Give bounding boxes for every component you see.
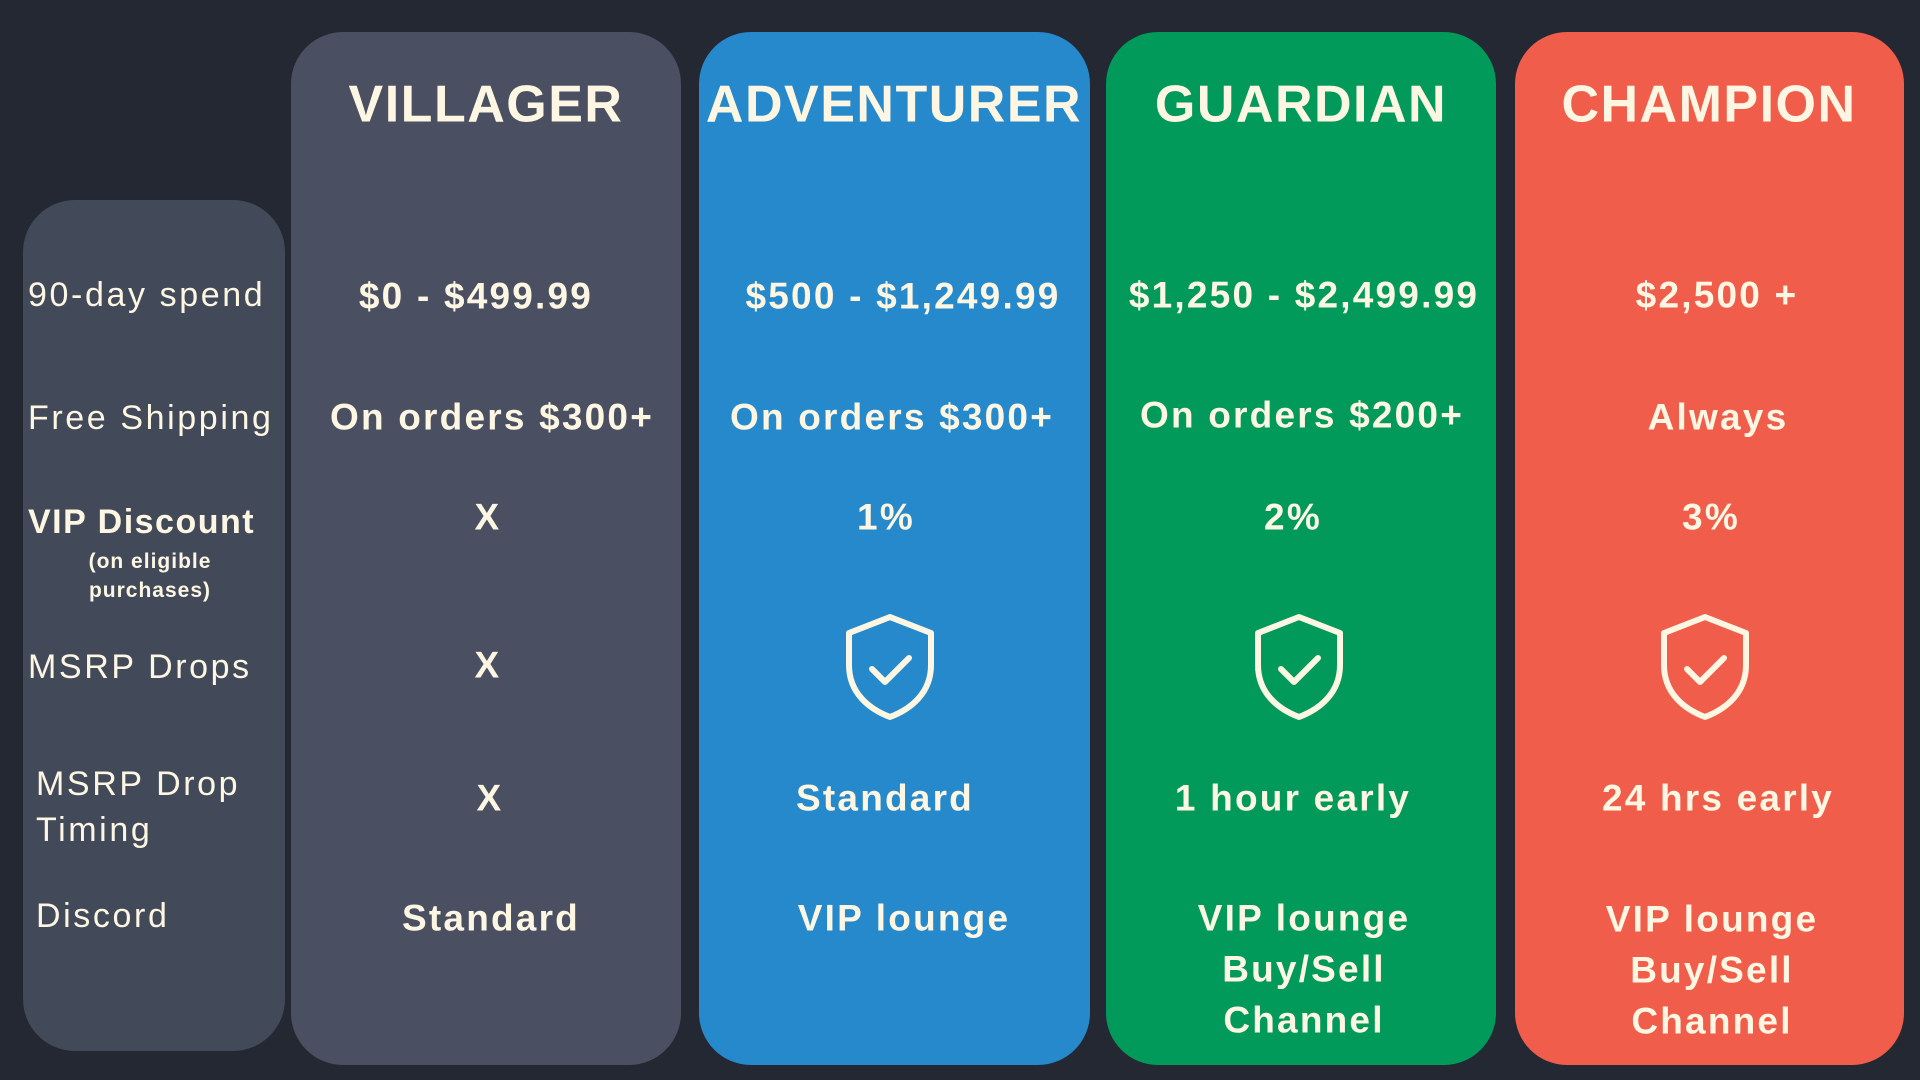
text: 24 hrs early xyxy=(1602,778,1834,818)
label: 90-day spend: 90-day spend xyxy=(28,276,265,314)
text: 3% xyxy=(1682,496,1740,538)
heading: adventurer: ADVENTURER xyxy=(706,76,1082,134)
label: VIP discount xyxy=(28,503,255,602)
label: VIP discount: purchases) xyxy=(89,579,211,602)
text: Buy/Sell xyxy=(1222,948,1386,990)
villager values: $0 - $499.99 xyxy=(359,276,593,316)
label: VIP discount: VIP Discount xyxy=(28,503,255,541)
heading: villager: VILLAGER xyxy=(349,76,623,134)
text: VIP lounge xyxy=(1606,898,1818,940)
text: X xyxy=(475,644,501,686)
panel: guardian xyxy=(1106,32,1496,1065)
champion values: $2,500 + xyxy=(1636,274,1798,316)
text: Buy/Sell xyxy=(1630,950,1794,990)
text: 1% xyxy=(857,496,915,538)
icon: shield check champion xyxy=(1661,614,1749,720)
adventurer values: $500 - $1,249.99 xyxy=(746,276,1060,316)
label: MSRP drops: MSRP Drops xyxy=(28,648,252,686)
heading: champion: CHAMPION xyxy=(1561,76,1857,134)
text: X xyxy=(477,778,503,818)
panel: adventurer xyxy=(699,32,1090,1065)
text: 1 hour early xyxy=(1175,778,1411,818)
heading: guardian: GUARDIAN xyxy=(1155,76,1447,134)
label: MSRP drop timing: Timing xyxy=(36,811,152,849)
text: On orders $300+ xyxy=(730,396,1054,438)
label: free shipping: Free Shipping xyxy=(28,399,274,437)
icon: shield check adventurer xyxy=(846,614,934,720)
text: 2% xyxy=(1264,496,1322,538)
panel: champion xyxy=(1515,32,1904,1065)
icon: shield check guardian xyxy=(1255,614,1343,720)
text: Channel xyxy=(1223,1000,1385,1040)
text: On orders $300+ xyxy=(330,396,654,438)
label: MSRP drop timing xyxy=(36,765,240,849)
text: Standard xyxy=(796,778,974,818)
panel: row labels xyxy=(23,200,285,1051)
label: discord: Discord xyxy=(36,897,169,935)
text: On orders $200+ xyxy=(1140,394,1464,436)
text: VIP lounge xyxy=(1198,898,1410,938)
label: MSRP drop timing: MSRP Drop xyxy=(36,765,240,803)
text: VIP lounge xyxy=(798,898,1010,938)
panel: villager xyxy=(291,32,681,1065)
text: X xyxy=(475,496,501,538)
guardian values: $1,250 - $2,499.99 xyxy=(1129,274,1479,316)
text: Standard xyxy=(402,898,580,938)
text: Always xyxy=(1648,396,1788,438)
label: VIP discount: (on eligible xyxy=(89,550,211,573)
text: Channel xyxy=(1631,1000,1793,1042)
